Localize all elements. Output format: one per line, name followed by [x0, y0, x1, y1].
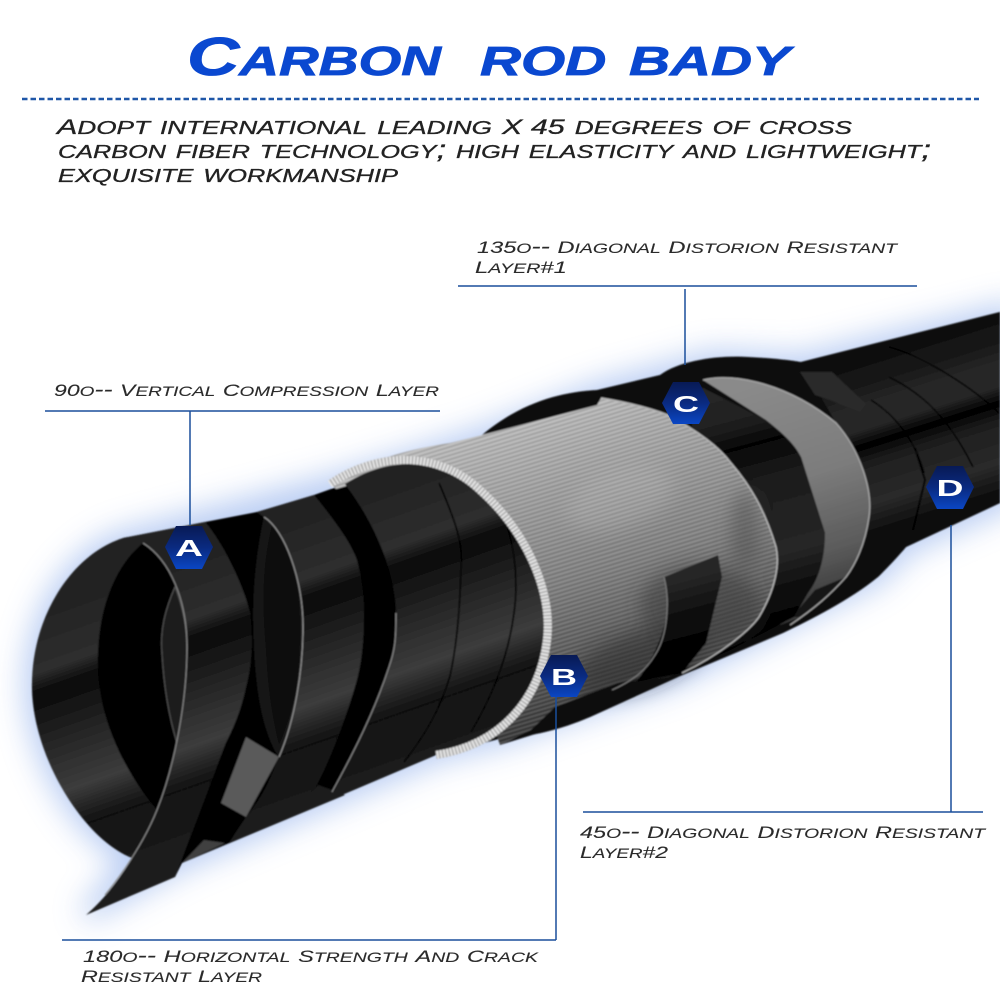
black strip on grey layer [636, 555, 722, 682]
lighter patch on tail [800, 372, 866, 412]
black band over grey [692, 388, 825, 667]
label 180: Resistant Layer [81, 965, 262, 987]
label 135: Layer #1 [475, 256, 567, 278]
title: rod bady [480, 22, 795, 88]
title: Carbon [187, 22, 443, 88]
rod body shapes [32, 312, 1000, 915]
marker A [165, 526, 213, 569]
label 180: 180 o-- Horizontal Strength And Crack [83, 945, 539, 967]
arc line of grey layer [601, 398, 777, 673]
callout C leader [458, 286, 917, 365]
marker D [926, 466, 974, 509]
label 45 [580, 821, 987, 863]
dark gap strip [318, 483, 396, 790]
callout B leader [62, 697, 556, 940]
rod illustration [32, 310, 1000, 915]
callout D leader [583, 525, 983, 812]
marker C: C [673, 391, 699, 417]
marker A: A [175, 535, 203, 561]
marker D: D [936, 475, 964, 501]
grey carbon layer C [330, 398, 777, 745]
label 90: 90 o-- Vertical Compression Layer [54, 379, 439, 401]
outer tail layer D [801, 312, 1000, 577]
marker B: B [551, 664, 577, 690]
tape with label A [86, 522, 252, 915]
title [187, 22, 795, 88]
front hole [98, 543, 187, 810]
callout A leader [45, 411, 440, 525]
second tape turn [229, 495, 364, 843]
front main tape [330, 464, 548, 800]
front ring inner wall [32, 538, 200, 858]
description text block: carbon fiber technology; high elasticity and lightweight; [58, 136, 931, 164]
marker C [662, 382, 710, 424]
lower sliver [182, 785, 345, 863]
front section black base [123, 484, 450, 877]
second opening [253, 517, 303, 757]
label 45: Layer #2 [580, 841, 669, 863]
description text block: exquisite workmanship [58, 160, 398, 188]
description text block [54, 112, 931, 188]
label 135: 135 o-- Diagonal Distorion Resistant [477, 236, 899, 258]
label 180 [81, 945, 539, 987]
grey layer fine stripes [330, 398, 777, 745]
piece visible through gap [221, 737, 279, 817]
label 45: 45 o-- Diagonal Distorion Resistant [580, 821, 987, 843]
silver knurled ring [330, 460, 548, 755]
marker B [540, 655, 588, 697]
description text block: A dopt international leading X 45 degrees of cross [54, 112, 852, 140]
rear bulge and tail base [440, 312, 1000, 755]
label 135 [475, 236, 899, 278]
slot [204, 805, 246, 842]
blue glow around rod [32, 310, 1000, 915]
grey layer two [703, 378, 870, 625]
grey layer shading [559, 456, 760, 710]
